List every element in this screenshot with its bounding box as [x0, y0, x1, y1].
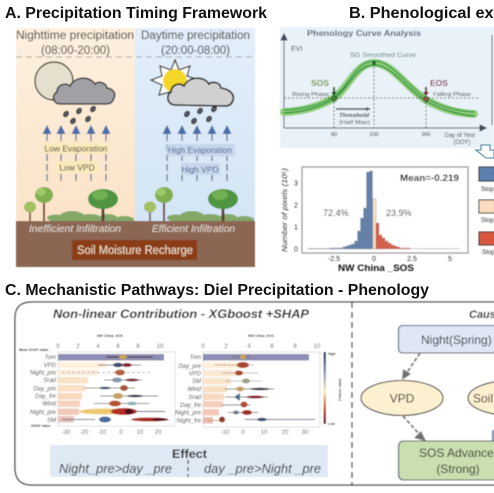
x axis label: (DOY): [454, 140, 470, 146]
bottom axis ticks: 10: [261, 430, 268, 436]
DOY tick labels: 365: [421, 132, 431, 138]
icon: night rain cloud: [53, 78, 115, 104]
bottom axis ticks: 30: [302, 430, 309, 436]
node: SOS advance: SOS Advance: [419, 446, 494, 460]
top axis ticks: [201, 344, 321, 350]
falling phase label: Falling Phase: [433, 92, 471, 98]
top axis ticks: 2: [76, 344, 80, 350]
legend: neutral slope: Slop: [481, 217, 494, 224]
variable labels: Srad: [43, 378, 57, 384]
bottom axis ticks: -10: [98, 430, 107, 436]
bottom axis ticks: 10: [137, 430, 144, 436]
nighttime hours: (08:00-20:00): [41, 45, 110, 57]
y tick labels: 1: [294, 224, 298, 232]
daytime background: [135, 28, 255, 222]
top axis ticks: 6: [270, 344, 274, 350]
y tick labels: 3: [294, 180, 298, 188]
SHAP chart: EOS: [175, 334, 321, 436]
title A: A. Precipitation Timing Framework: [5, 5, 267, 22]
nighttime background: [16, 28, 135, 222]
icon: sun: [151, 60, 198, 100]
top axis ticks: 10: [314, 344, 321, 350]
chart title: NW China_EOS: [248, 334, 275, 338]
non-linear heading: Non-linear Contribution - XGboost +SHAP: [53, 307, 310, 321]
arrow: VPD to SOS: [403, 416, 426, 441]
SOS label and marker: [311, 78, 337, 101]
day greater than night: day _pre>Night _pre: [204, 461, 321, 476]
variable labels: Wind: [187, 387, 202, 393]
label: high evaporation: High Evaporation: [168, 145, 232, 155]
night vegetation: [24, 187, 134, 222]
threshold label: [336, 107, 371, 126]
daytime hours: (20:00-08:00): [161, 45, 230, 57]
arrow: soil to SOS: [492, 430, 494, 441]
DOY tick labels: 150: [369, 132, 379, 138]
y axis title: Number of pixels (10⁵): [282, 168, 289, 252]
icon: day rain cloud: [168, 78, 233, 106]
panel C: mechanistic pathways: [15, 302, 494, 485]
y tick labels: [294, 180, 298, 254]
y tick labels: 0: [294, 246, 298, 254]
SHAP caption: SHAP value: [31, 424, 51, 428]
SHAP swarm: [62, 354, 169, 422]
72.4 percent label: 72.4%: [323, 208, 349, 218]
rounded frame: [15, 302, 494, 485]
peak marker: [372, 61, 376, 65]
title B: B. Phenological ext: [349, 5, 494, 22]
variable labels: VPD: [44, 363, 57, 369]
variable labels: Wind: [42, 402, 57, 408]
top axis ticks: 0: [56, 344, 60, 350]
label: low evaporation: Low Evaporation: [44, 144, 108, 154]
SG curve label: SG Smoothed Curve: [350, 53, 417, 59]
variable labels: Day_pre: [33, 386, 57, 392]
23.9 percent label: 23.9%: [386, 208, 412, 218]
bottom axis ticks: -10: [221, 430, 230, 436]
variable labels: [175, 355, 202, 424]
feature value colorbar: Feature value: [338, 378, 342, 401]
effect heading: Effect: [172, 447, 207, 461]
x axis label: [444, 133, 476, 146]
node: night spring precipitation: Night(Spring): [421, 333, 492, 347]
variable labels: [30, 355, 57, 424]
variable labels: Night_pre: [175, 410, 202, 416]
variable labels: Night_pre: [30, 370, 57, 376]
icon: hollow down arrow: [476, 145, 494, 158]
top axis ticks: 4: [96, 344, 100, 350]
node: night spring precipitation: [398, 326, 494, 353]
feature value colorbar: High: [328, 352, 336, 356]
feature value colorbar: [324, 352, 342, 426]
x tick labels: 5: [448, 256, 452, 263]
axes: [281, 34, 486, 131]
bottom axis ticks: 0: [241, 430, 245, 436]
node: SOS advance: [398, 441, 494, 480]
top axis ticks: [56, 344, 164, 350]
soil moisture recharge box: Soil Moisture Recharge: [77, 245, 193, 257]
top axis ticks: 8: [136, 344, 140, 350]
night evaporation arrows: [42, 125, 110, 183]
x tick labels: -2.5: [328, 256, 340, 263]
variable labels: SM: [192, 379, 201, 385]
legend: positive slope: [479, 232, 494, 256]
day evaporation arrows: [162, 125, 232, 183]
top axis ticks: 0: [201, 344, 205, 350]
day vegetation: [144, 187, 254, 222]
nighttime heading: Nighttime precipitation: [16, 30, 134, 42]
legend: negative slope: Slop: [481, 186, 494, 193]
top axis ticks: 10: [157, 344, 164, 350]
mean SHAP caption: Mean SHAP value: [19, 348, 49, 352]
bottom axis ticks: -20: [80, 430, 89, 436]
histogram: [282, 167, 494, 274]
variable labels: Night_fre: [177, 418, 202, 424]
EOS label and marker: [423, 78, 448, 102]
bottom axis ticks: [221, 430, 309, 436]
plot box: [203, 352, 320, 427]
EOS label and marker: EOS: [430, 78, 448, 88]
top axis ticks: 2: [224, 344, 228, 350]
variable labels: Srad: [188, 395, 202, 401]
threshold label: (Half Max): [339, 120, 370, 126]
variable labels: Night_pre: [30, 410, 57, 416]
importance bars: [58, 354, 164, 422]
label: high VPD: High VPD: [181, 164, 219, 174]
SHAP swarm: [208, 354, 315, 422]
chart title: Phenology Curve Analysis: [307, 29, 422, 38]
soil moisture recharge box: [72, 240, 197, 260]
curve background: [280, 27, 494, 148]
panel A: precipitation timing framework: [16, 28, 255, 267]
icon: moon: [35, 62, 73, 100]
x tick labels: [328, 256, 452, 263]
variable labels: SM: [47, 418, 56, 424]
center dashed divider: [351, 302, 353, 485]
causal pathway diagram: [361, 326, 494, 480]
variable labels: Tom: [190, 355, 201, 361]
legend: negative slope: [479, 167, 494, 193]
DOY tick labels: [331, 132, 431, 138]
plot box: [58, 352, 175, 426]
efficient infiltration label: Efficient Infiltration: [152, 224, 235, 235]
x tick labels: 2.5: [407, 256, 417, 263]
x axis title: NW China _SOS: [338, 263, 414, 274]
EVI axis label: EVI: [291, 46, 302, 53]
variable labels: Day_fre: [180, 403, 202, 409]
soil layer: [16, 221, 255, 267]
node: VPD: [361, 380, 443, 416]
daytime heading: Daytime precipitation: [141, 30, 250, 42]
importance bars: [203, 354, 309, 424]
bottom axis ticks: [62, 430, 162, 436]
bottom axis ticks: 0: [119, 430, 123, 436]
node: SOS advance: (Strong): [436, 462, 480, 476]
node: soil moisture: [468, 380, 494, 416]
title C: C. Mechanistic Pathways: Diel Precipitation - Phenology: [5, 282, 429, 299]
positive slope bars: [376, 223, 410, 249]
day rain drops: [183, 105, 218, 125]
bottom axis ticks: -30: [62, 430, 71, 436]
night rain drops: [62, 105, 97, 125]
rising phase label: Rising Phase: [292, 92, 329, 98]
green smoothed curve: [284, 61, 474, 116]
top axis ticks: 6: [116, 344, 120, 350]
threshold dotted lines: [284, 63, 478, 128]
feature value colorbar: Low: [328, 422, 335, 426]
negative slope bars: [308, 171, 372, 249]
chart title: NW China_SOS: [97, 334, 124, 338]
variable labels: VPD: [189, 372, 202, 378]
variable labels: Day_fre: [35, 394, 57, 400]
SOS label and marker: SOS: [311, 78, 329, 88]
plot frame: [302, 167, 468, 253]
x tick labels: 0: [372, 256, 376, 263]
node: soil moisture: Soil: [473, 392, 493, 406]
y tick labels: 2: [294, 202, 298, 210]
effect box: [50, 445, 328, 477]
night greater than day: Night_pre>day _pre: [59, 461, 172, 476]
second curve edge: [491, 35, 493, 125]
mean label: Mean=-0.219: [400, 173, 459, 184]
arrow: night to VPD: [402, 353, 420, 380]
legend: neutral slope: [479, 200, 494, 224]
top axis ticks: 4: [247, 344, 251, 350]
inefficient infiltration label: Inefficient Infiltration: [29, 224, 121, 235]
x axis label: Day of Year: [444, 133, 476, 139]
variable labels: Tom: [45, 355, 56, 361]
SHAP chart: SOS: [19, 334, 175, 436]
label: low VPD: Low VPD: [59, 162, 95, 172]
DOY tick labels: 60: [331, 132, 337, 138]
threshold label: Threshold: [339, 113, 370, 119]
bottom axis ticks: 20: [282, 430, 289, 436]
effect background: [50, 445, 328, 477]
bottom axis ticks: 20: [155, 430, 162, 436]
node: VPD: VPD: [390, 392, 415, 406]
panel B: phenology curve: [280, 27, 494, 148]
top axis ticks: 8: [293, 344, 297, 350]
variable labels: Day_pre: [178, 364, 202, 370]
neutral slope bar: [373, 199, 376, 249]
